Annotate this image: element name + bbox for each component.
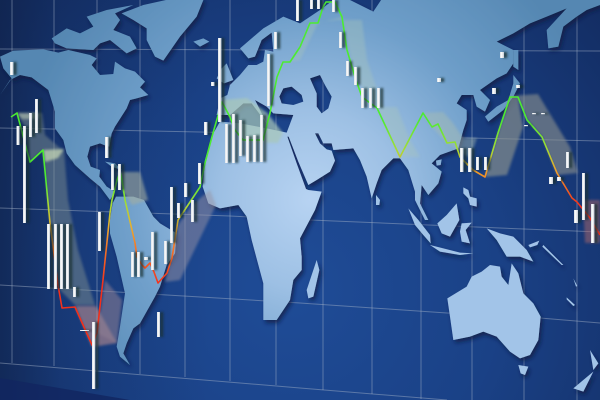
ribbon: South Pacific [75, 306, 117, 347]
ribbon: Central America [117, 172, 148, 205]
ribbon: China [423, 112, 477, 158]
island: Philippines [463, 187, 477, 207]
continent: North America [0, 49, 148, 200]
ribbon: Philippine Sea [485, 97, 523, 177]
island: Iceland [193, 38, 209, 47]
island: Hainan [436, 159, 442, 166]
southern hemisphere land [307, 187, 598, 392]
dark bottom-left band [0, 378, 130, 400]
ribbon: North Pacific [17, 113, 95, 305]
continent: Arctic islands [52, 5, 137, 53]
ribbon highlight: North Pacific top [17, 113, 40, 119]
island: Java [430, 245, 473, 255]
ribbon: South Atlantic [165, 190, 216, 282]
ribbon: Mediterranean [222, 98, 283, 143]
ribbon: right edge [583, 200, 600, 243]
island: Britain [217, 63, 233, 83]
island: Japan [485, 75, 520, 122]
island: Madagascar [307, 260, 319, 298]
ribbon highlight: North Pacific fold [43, 149, 64, 162]
islands: Pacific chain [528, 241, 577, 306]
island: Sakhalin [513, 50, 518, 70]
island: Sri Lanka [376, 195, 380, 205]
ribbon: Pacific [510, 94, 578, 175]
island: Borneo [437, 203, 459, 237]
continent: Africa and Eurasia [203, 0, 600, 320]
price line: east section [300, 2, 600, 235]
island: Tasmania [518, 365, 528, 375]
island: Sulawesi [460, 223, 472, 243]
island: Sumatra [408, 208, 431, 243]
continent: Australia [447, 263, 541, 358]
price line: west section [11, 47, 300, 345]
island: New Zealand [573, 350, 598, 392]
ribbon: Andes [97, 280, 122, 343]
island: Greenland [122, 0, 204, 61]
island: Cuba [105, 162, 122, 170]
island: New Guinea [487, 228, 533, 262]
continent: South America [110, 197, 177, 365]
ribbon: Siberia [290, 17, 420, 157]
